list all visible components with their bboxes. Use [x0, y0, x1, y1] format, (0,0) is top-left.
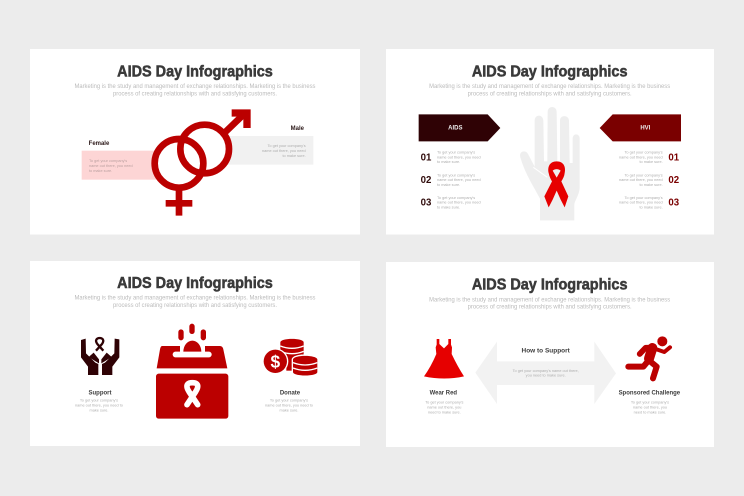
HVI list: 02: [668, 175, 679, 186]
icon: coins: $: [271, 351, 281, 371]
AIDS list: To get your company's: [437, 150, 475, 154]
support label: Support: [89, 391, 111, 397]
wear red label: To get your company's: [425, 400, 464, 404]
support label: [75, 391, 123, 413]
subtitle: [429, 84, 670, 97]
support label: name out there, you need to: [75, 404, 123, 408]
AIDS list: name out there, you need: [437, 178, 481, 182]
AIDS list: To get your company's: [437, 173, 475, 177]
female box: To get your company's: [89, 159, 127, 163]
icon: hands holding ribbon: [81, 338, 119, 375]
AIDS list: 02: [421, 175, 431, 186]
double arrow: [475, 342, 616, 404]
subtitle: process of creating relationships with and satisfying customers.: [468, 305, 632, 311]
HVI arrow banner: HVI: [640, 126, 651, 132]
subtitle: process of creating relationships with and satisfying customers.: [113, 91, 277, 97]
female box: name out there, you need: [89, 164, 133, 168]
panel: AIDS and HVI: [386, 49, 714, 234]
subtitle: [74, 84, 316, 97]
male box: To get your company's: [267, 144, 306, 148]
icon: running figure: [628, 336, 670, 378]
male box: name out there, you need: [262, 149, 306, 153]
HVI list: to make sure.: [639, 206, 663, 210]
sponsored challenge label: Sponsored Challenge: [619, 391, 681, 397]
title: AIDS Day Infographics: [472, 63, 627, 80]
AIDS list: 01: [421, 152, 432, 163]
icon: donation box: [156, 324, 228, 419]
AIDS list: to make sure.: [437, 206, 460, 210]
sponsored challenge label: [619, 391, 681, 414]
AIDS list: To get your company's: [437, 196, 475, 200]
subtitle: Marketing is the study and management of exchange relationships. Marketing is the business: [74, 84, 316, 90]
AIDS list: [421, 150, 481, 210]
HVI list: name out there, you need: [619, 178, 663, 182]
female box: Female: [89, 141, 110, 147]
AIDS list: to make sure.: [437, 160, 460, 164]
AIDS arrow banner: [419, 114, 500, 141]
icon: hand: [520, 107, 580, 220]
title: AIDS Day Infographics: [117, 63, 273, 80]
HVI list: To get your company's: [624, 196, 663, 200]
panel: donation: [30, 261, 360, 446]
HVI list: To get your company's: [624, 150, 663, 154]
wear red label: [425, 391, 464, 414]
donate label: [265, 391, 313, 413]
subtitle: Marketing is the study and management of exchange relationships. Marketing is the business: [429, 84, 670, 90]
title: AIDS Day Infographics: [472, 277, 627, 294]
subtitle: [429, 297, 670, 311]
female box: [82, 141, 157, 180]
wear red label: need to make sure.: [428, 410, 461, 414]
support label: make sure.: [90, 409, 108, 413]
subtitle: [74, 296, 316, 309]
icon: intertwined gender symbols: [155, 109, 251, 216]
AIDS arrow banner: AIDS: [448, 126, 462, 132]
AIDS list: to make sure.: [437, 183, 460, 187]
double arrow: How to Support: [522, 347, 571, 354]
panel: how to support: [386, 262, 714, 447]
donate label: make sure.: [280, 409, 298, 413]
AIDS list: name out there, you need: [437, 155, 481, 159]
support label: To get your company's: [80, 399, 118, 403]
subtitle: process of creating relationships with and satisfying customers.: [113, 303, 277, 309]
male box: to make sure.: [282, 154, 306, 158]
HVI list: To get your company's: [624, 173, 663, 177]
panel: gender symbols: [30, 49, 360, 234]
HVI list: [619, 150, 680, 210]
male box: [227, 126, 313, 165]
double arrow: To get your company's name out there,: [513, 369, 579, 373]
HVI list: name out there, you need: [619, 201, 663, 205]
wear red label: name out there, you: [427, 405, 461, 409]
HVI list: to make sure.: [639, 183, 663, 187]
icon: coins: [262, 339, 319, 376]
AIDS list: 03: [421, 198, 432, 209]
icon: red dress: [424, 339, 464, 378]
sponsored challenge label: name out there, you: [633, 405, 667, 409]
donate label: name out there, you need to: [265, 404, 313, 408]
icon: red ribbon: [544, 161, 568, 207]
HVI list: to make sure.: [639, 160, 663, 164]
sponsored challenge label: need to make sure.: [634, 410, 666, 414]
subtitle: Marketing is the study and management of exchange relationships. Marketing is the business: [74, 296, 316, 302]
wear red label: Wear Red: [430, 391, 457, 397]
donate label: To get your company's: [270, 399, 308, 403]
double arrow: you need to make sure.: [526, 374, 566, 378]
title: AIDS Day Infographics: [117, 275, 273, 292]
AIDS list: name out there, you need: [437, 201, 481, 205]
subtitle: process of creating relationships with and satisfying customers.: [468, 91, 632, 97]
HVI arrow banner: [600, 114, 681, 141]
HVI list: 03: [668, 198, 680, 209]
donate label: Donate: [280, 391, 301, 397]
HVI list: name out there, you need: [619, 155, 663, 159]
subtitle: Marketing is the study and management of exchange relationships. Marketing is the business: [429, 297, 670, 303]
male box: Male: [291, 126, 305, 132]
female box: to make sure.: [89, 169, 112, 173]
sponsored challenge label: To get your company's: [631, 400, 669, 404]
HVI list: 01: [668, 152, 680, 163]
